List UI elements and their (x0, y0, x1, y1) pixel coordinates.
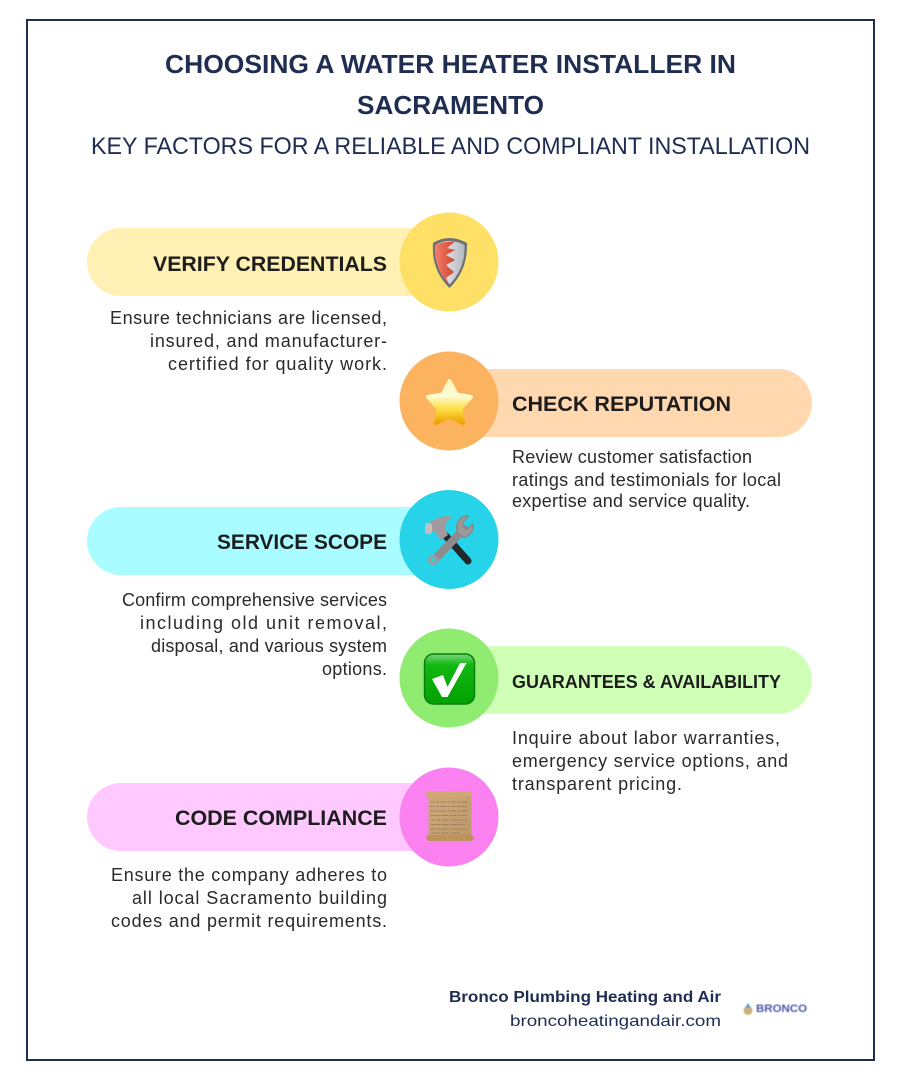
icon: shield (433, 238, 467, 288)
description: code compliance: codes and permit requirements. (111, 911, 387, 931)
description: verify credentials: insured, and manufacturer- (150, 331, 387, 351)
description: guarantees and availability: Inquire about labor warranties, (512, 728, 780, 748)
pill: check reputation (450, 369, 812, 437)
icon: scroll (426, 791, 474, 841)
description: code compliance: Ensure the company adheres to (111, 865, 387, 885)
description: guarantees and availability: transparent pricing. (512, 774, 682, 794)
icon: star (428, 381, 471, 423)
panel: verify credentials (87, 212, 499, 374)
footer: company details: broncoheatingandair.com (510, 1013, 721, 1030)
pill: service scope (87, 507, 450, 575)
description: code compliance: all local Sacramento building (132, 888, 387, 908)
description: check reputation: Review customer satisfaction (512, 447, 752, 467)
panel: code compliance (87, 768, 498, 931)
description: guarantees and availability: emergency service options, and (512, 751, 788, 771)
circle: verify credentials (400, 212, 498, 312)
footer: company details: Bronco Plumbing Heating and Air (449, 989, 721, 1006)
pill: verify credentials (87, 228, 450, 296)
description: check reputation: expertise and service quality. (512, 491, 750, 511)
footer: company details (449, 989, 721, 1030)
description: verify credentials: certified for quality work. (168, 354, 387, 374)
heading: code compliance: CODE COMPLIANCE (175, 807, 387, 830)
description: service scope: Confirm comprehensive services (122, 590, 387, 610)
heading: service scope: SERVICE SCOPE (217, 531, 387, 554)
panel: service scope (87, 490, 498, 679)
pill: guarantees and availability (450, 646, 812, 714)
circle: service scope (400, 490, 498, 589)
description: service scope: disposal, and various system (151, 636, 387, 656)
description: service scope (122, 590, 387, 679)
logo: Bronco: BRONCO (756, 1003, 807, 1015)
title (165, 49, 736, 120)
heading: guarantees and availability: GUARANTEES & AVAILABILITY (512, 672, 781, 692)
description: verify credentials: Ensure technicians are licensed, (110, 308, 387, 328)
subtitle: KEY FACTORS FOR A RELIABLE AND COMPLIANT INSTALLATION (91, 133, 810, 160)
title: SACRAMENTO (357, 90, 544, 120)
circle: check reputation (400, 352, 498, 450)
title: CHOOSING A WATER HEATER INSTALLER IN (165, 49, 736, 79)
icon: tools (425, 516, 473, 564)
heading: check reputation: CHECK REPUTATION (512, 393, 731, 416)
circle: code compliance (400, 768, 498, 866)
panel: check reputation (400, 352, 812, 511)
heading: verify credentials: VERIFY CREDENTIALS (153, 253, 387, 276)
description: verify credentials (110, 308, 387, 374)
description: code compliance (111, 865, 387, 931)
panel: guarantees and availability (400, 628, 812, 794)
circle: guarantees and availability (400, 628, 498, 728)
description: service scope: including old unit removal, (140, 613, 387, 633)
description: service scope: options. (322, 659, 387, 679)
pill: code compliance (87, 783, 450, 851)
icon: check mark (424, 654, 474, 704)
description: check reputation: ratings and testimonials for local (512, 470, 781, 490)
description: check reputation (512, 447, 781, 511)
description: guarantees and availability (512, 728, 788, 794)
